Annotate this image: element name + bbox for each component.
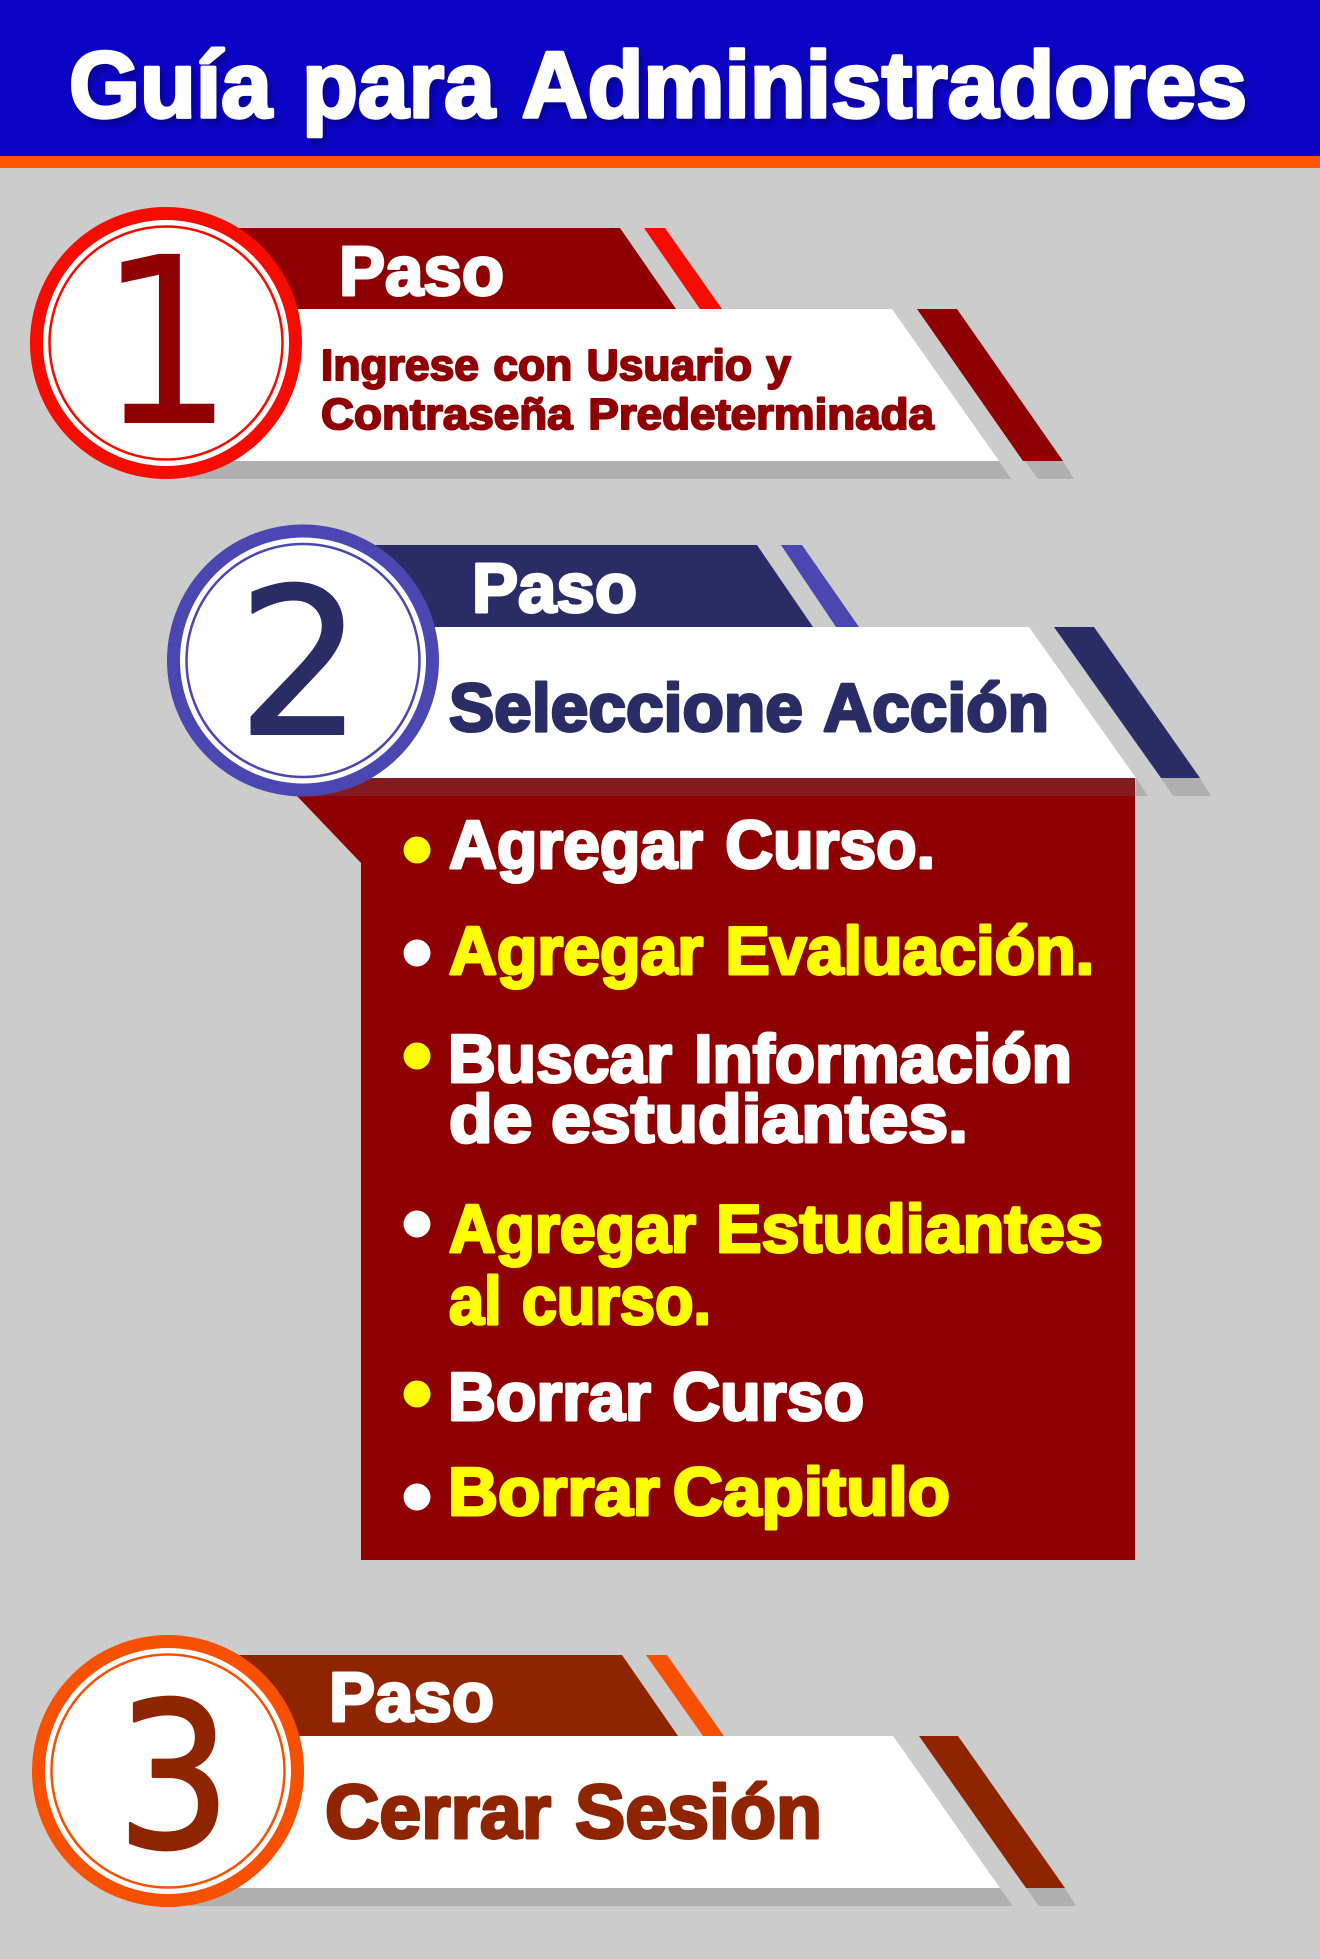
heading band: step 3 [232, 1655, 678, 1736]
instruction text: step 1: Contraseña Predeterminada [321, 390, 935, 439]
item: Buscar Información: Buscar Información [448, 1021, 1072, 1097]
panel: step 1 [30, 207, 1074, 479]
shadow: step 2 [290, 778, 1211, 796]
item: Agregar Curso: Agregar Curso. [449, 807, 935, 883]
label: Paso 2: Paso [472, 549, 637, 627]
heading band: step 2 [367, 545, 813, 627]
panel: action list [290, 778, 1211, 1560]
item: Borrar Curso: Borrar Curso [448, 1359, 864, 1435]
title: Guía para Administradores [69, 32, 1247, 137]
label: Paso 1: Paso [339, 232, 504, 310]
instruction text: step 1 [321, 341, 935, 439]
shadow: step 1 [190, 461, 1074, 479]
white panel: step 2 [330, 627, 1136, 778]
side stripe: step 2 [1054, 627, 1200, 778]
label: Paso 3: Paso [329, 1658, 494, 1736]
heading text: Cerrar Sesión: Cerrar Sesión [325, 1770, 822, 1855]
list background [297, 778, 1135, 1560]
white panel: step 1 [200, 309, 999, 461]
item: Agregar Estudiantes [404, 1191, 1103, 1339]
heading band: step 1 [230, 228, 676, 309]
item: Agregar Estudiantes: Agregar [449, 1191, 696, 1267]
badge: step 2: 2 [237, 546, 363, 783]
accent stripe: step 3 [646, 1655, 724, 1736]
panel: step 2 [167, 524, 1200, 796]
heading text: Seleccione Acción: Seleccione Acción [449, 670, 1049, 746]
accent stripe: step 1 [644, 228, 722, 309]
badge: step 1 [30, 207, 302, 479]
accent stripe: step 2 [781, 545, 859, 627]
side stripe: step 1 [917, 309, 1063, 461]
badge: step 1: 1 [98, 208, 234, 478]
instruction text: step 1: Ingrese con Usuario y [321, 341, 792, 390]
item: Buscar Información [404, 1021, 1072, 1157]
badge: step 3 [32, 1635, 304, 1907]
item: Agregar Estudiantes: al curso. [449, 1263, 711, 1339]
panel: step 3 [32, 1635, 1076, 1907]
header banner [0, 0, 1320, 168]
white panel: step 3 [200, 1736, 1000, 1888]
item: Buscar Información: de estudiantes. [449, 1081, 968, 1157]
badge: step 3: 3 [116, 1659, 232, 1895]
item: Agregar Evaluación: Agregar Evaluación. [449, 913, 1094, 989]
item: Borrar Capitulo: Borrar Capitulo [448, 1454, 950, 1530]
badge: step 2 [167, 524, 439, 796]
item: Agregar Estudiantes: Estudiantes [716, 1191, 1103, 1267]
side stripe: step 3 [919, 1736, 1065, 1888]
shadow: step 3 [190, 1888, 1076, 1906]
